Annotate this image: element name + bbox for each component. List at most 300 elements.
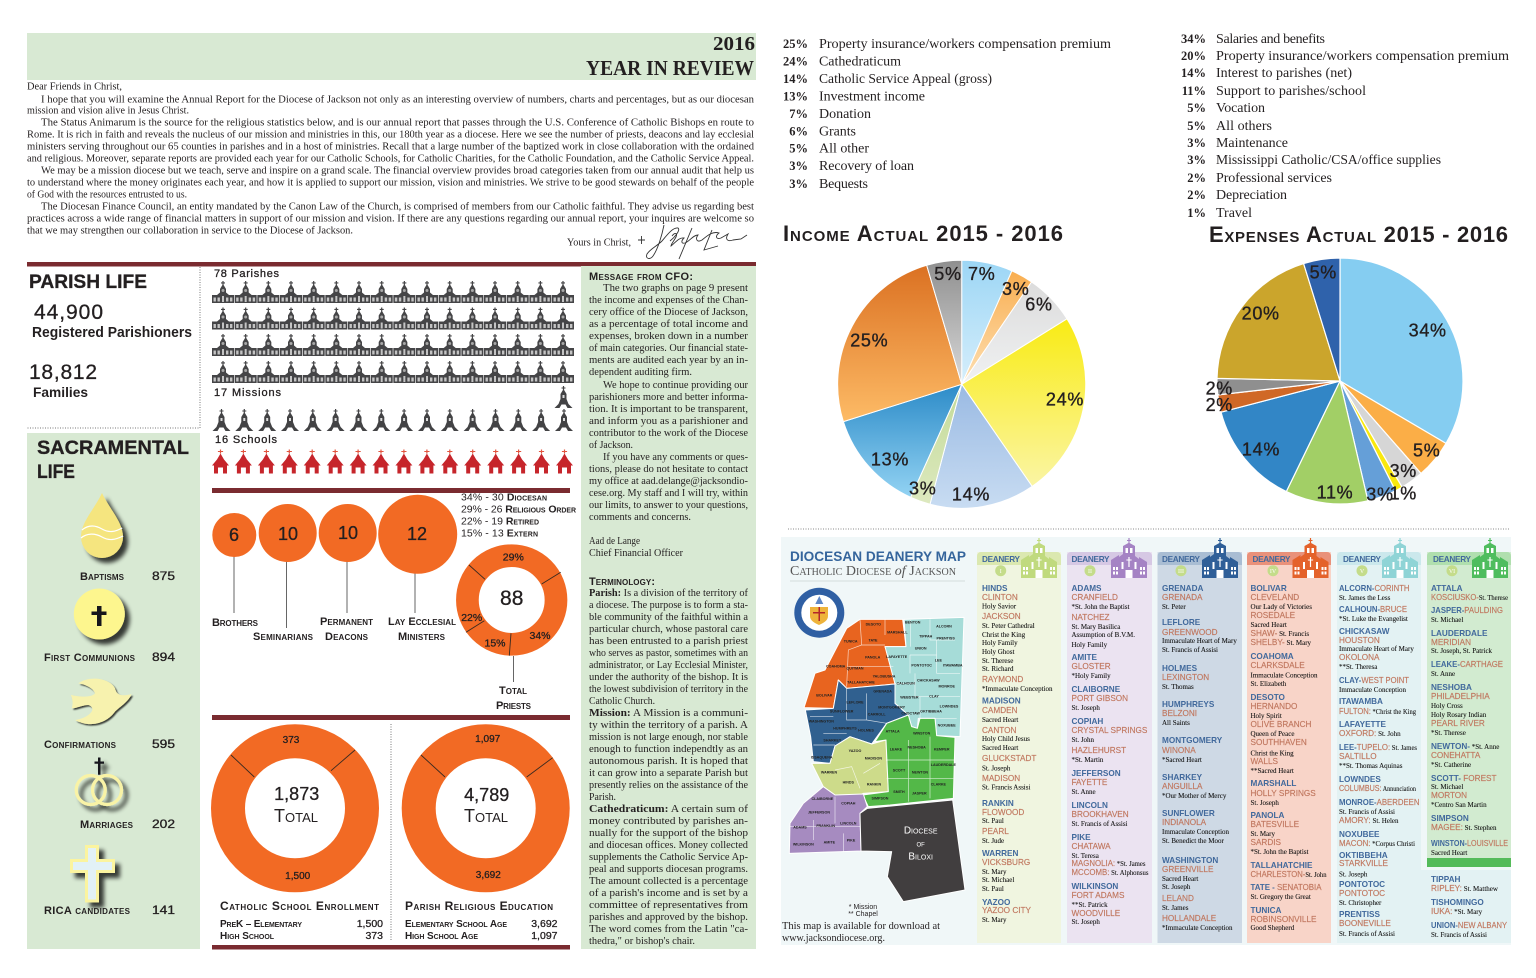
income list: Investment income — [819, 90, 925, 104]
deanery iv: HERNANDO — [1250, 702, 1297, 711]
income list: 6% — [789, 124, 808, 138]
deanery iv: Our Lady of Victories — [1250, 603, 1312, 611]
deanery ii: MAGNOLIA: *St. James — [1072, 859, 1146, 868]
map of mississippi: SUNFLOWER — [830, 709, 854, 713]
deanery iv: SHAW- St. Francis — [1250, 629, 1309, 638]
letter from the bishop: that we may strengthen our collaboration in service to the Diocese of Jackson. — [27, 226, 353, 236]
map of mississippi: ADAMS — [793, 826, 807, 830]
deanery v: LEE-TUPELO: St. James — [1339, 743, 1417, 752]
panel: sacramental life: SACRAMENTAL — [37, 437, 189, 459]
panel: message from cfo and terminology: contributor to the work of the Diocese — [589, 428, 748, 439]
income list: Catholic Service Appeal (gross) — [819, 72, 992, 87]
map of mississippi: HOLMES — [858, 729, 874, 733]
letter from the bishop: mission and vision alive in Jesus Christ. — [27, 106, 189, 116]
panel: message from cfo and terminology: ble community of the faithful within a — [589, 612, 748, 623]
first communions label — [44, 652, 176, 664]
map of mississippi: Diocese — [904, 826, 938, 837]
donut chart: catholic school enrollment: 373 — [365, 930, 383, 942]
deanery ii: II — [1088, 569, 1092, 575]
map of mississippi: MADISON — [865, 757, 882, 761]
letter from the bishop: ministers serving throughout our 65 counties in parishes and in a host of ministries. Recall that a large number of the baptized work in close collaboration with the ordained — [27, 142, 754, 152]
deanery v: St. Francis of Assisi — [1339, 930, 1395, 938]
letter from the bishop: The Diocesan Finance Council, an entity mandated by the Canon Law of the Church, is comprised of members from our Catholic faithful. They advise us regarding best — [41, 202, 754, 212]
map of mississippi: WARREN — [821, 771, 837, 775]
deanery ii: COPIAH — [1072, 717, 1103, 726]
map of mississippi: PANOLA — [865, 656, 881, 660]
deanery iii: GREENWOOD — [1162, 628, 1218, 637]
clergy bubbles — [212, 495, 457, 643]
confirmations label — [44, 739, 175, 751]
panel: message from cfo and terminology: who serves as pastor, sometimes with an — [589, 648, 749, 659]
map of mississippi: SHARKEY — [823, 739, 842, 743]
panel: message from cfo and terminology: The two graphs on page 9 present — [603, 283, 748, 294]
panel: parish life: 44,900 — [34, 301, 103, 324]
deanery vi: CONEHATTA — [1431, 751, 1481, 760]
deanery v: St. Francis of Assisi — [1339, 808, 1395, 816]
deanery iv: CLEVELAND — [1250, 593, 1299, 602]
panel: message from cfo and terminology: We hope to continue providing our — [603, 380, 749, 391]
pie chart: income: 14% — [952, 484, 990, 504]
deanery vi: St. Michael — [1431, 783, 1463, 791]
deanery i: St. Paul — [982, 817, 1004, 825]
deanery v: LOWNDES — [1339, 775, 1381, 784]
divider bar above enrollment — [212, 715, 570, 720]
panel: message from cfo and terminology: committee of representatives from — [589, 900, 748, 911]
clergy bubbles: Ministers — [398, 631, 446, 643]
map key — [848, 904, 878, 918]
pie chart: expenses: 2% — [1206, 378, 1233, 398]
map of mississippi: HINDS — [843, 781, 855, 785]
expenses list: 5% — [1187, 101, 1206, 115]
confirmations label: Confirmations — [44, 739, 117, 751]
deanery ii: FORT ADAMS — [1072, 891, 1125, 900]
expenses list: 2% — [1187, 171, 1206, 185]
expenses list: 5% — [1187, 119, 1206, 133]
donut chart: parish religious education: Total — [464, 806, 508, 826]
letter from the bishop: and religious. Moreover, separate reports are provided each year for our Catholic Schools, for Catholic Charities, for the Catholic Foundation, and the Catholic Service Appeal. — [27, 154, 754, 164]
donut chart: catholic school enrollment: Total — [274, 806, 318, 826]
deanery v: MACON: *Corpus Christi — [1339, 839, 1415, 848]
deanery ii: AMITE — [1072, 653, 1098, 662]
map of mississippi: SMITH — [893, 790, 905, 794]
deanery iii: LEFLORE — [1162, 618, 1201, 627]
heading: income actual: Income Actual 2015 - 2016 — [783, 221, 1063, 246]
income list: 5% — [789, 142, 808, 156]
priests legend: 15% - 13 Extern — [461, 528, 538, 540]
deanery ii: St. Joseph — [1072, 704, 1100, 712]
deanery v: Immaculate Conception — [1339, 686, 1407, 694]
donut chart: total priests: Total — [499, 685, 527, 697]
deanery i: St. Mary — [982, 916, 1007, 924]
pie chart: income: 13% — [871, 450, 909, 470]
deanery iii: GRENADA — [1162, 593, 1203, 602]
deanery i: JACKSON — [982, 612, 1021, 621]
deanery i: Holy Child Jesus — [982, 735, 1030, 743]
expenses list: Professional services — [1216, 171, 1332, 186]
deanery iii: St. Benedict the Moor — [1162, 837, 1224, 845]
map of mississippi: AMITE — [824, 841, 836, 845]
deanery i: VICKSBURG — [982, 858, 1030, 867]
map of mississippi: WINSTON — [913, 732, 931, 736]
expenses list: 1% — [1187, 206, 1206, 220]
first communions label: First Communions — [44, 652, 136, 664]
panel: message from cfo and terminology: Mission: A Mission is a communi- — [589, 708, 749, 719]
panel: message from cfo and terminology: the lowest subdivision of territory in the — [589, 684, 748, 695]
donut chart: catholic school enrollment: 1,500 — [285, 871, 311, 882]
panel: message from cfo and terminology: The amount collected is a percentage — [589, 876, 748, 887]
deanery ii: St. Joseph — [1072, 918, 1100, 926]
deanery iii — [1158, 538, 1242, 943]
panel: message from cfo and terminology: tions, please do not hesitate to contact — [589, 464, 748, 475]
deanery v: DEANERY — [1343, 555, 1382, 564]
deanery v: OKTIBBEHA — [1339, 851, 1388, 860]
map of mississippi: WILKINSON — [793, 843, 814, 847]
deanery vi: St. Francis of Assisi — [1431, 931, 1487, 939]
map of mississippi: PIKE — [847, 838, 856, 842]
panel: message from cfo and terminology: thedra," or bishop's chair. — [589, 936, 695, 947]
pie chart: income: 3% — [909, 478, 936, 498]
deanery ii — [1067, 538, 1152, 943]
icon: wedding rings and cross — [76, 758, 122, 804]
donut chart: total priests: 34% — [529, 630, 551, 642]
deanery i: Holy Savior — [982, 602, 1017, 610]
map title: Catholic Diocese of Jackson — [790, 564, 956, 579]
panel: message from cfo and terminology: our limits, to answer to your questions, — [589, 500, 748, 511]
deanery iii: LELAND — [1162, 894, 1194, 903]
map of mississippi: ITAWAMBA — [943, 664, 963, 668]
panel: message from cfo and terminology: it can grow into a separate Parish but — [589, 768, 748, 779]
map of mississippi: KEMPER — [934, 748, 950, 752]
deanery iv: CLARKSDALE — [1250, 661, 1305, 670]
deanery i: GLUCKSTADT — [982, 754, 1036, 763]
expenses list: Travel — [1216, 206, 1252, 221]
deanery iv: TATE - SENATOBIA — [1250, 883, 1322, 892]
map of mississippi: COPIAH — [841, 802, 856, 806]
map of mississippi: MONROE — [938, 684, 955, 688]
income list: 7% — [789, 107, 808, 121]
icon: communion host — [74, 588, 125, 640]
clergy bubbles: 10 — [278, 524, 298, 544]
deanery ii: St. Mary Basilica — [1072, 623, 1121, 631]
income list: 3% — [789, 177, 808, 191]
donut chart: total priests: 15% — [484, 638, 506, 650]
deanery ii: Assumption of B.V.M. — [1072, 631, 1135, 639]
signature — [638, 225, 747, 259]
deanery vi: PHILADELPHIA — [1431, 692, 1490, 701]
donut chart: total priests: Priests — [496, 700, 532, 712]
deanery i: FLOWOOD — [982, 808, 1024, 817]
priests legend: 29% - 26 Religious Order — [461, 504, 576, 516]
pie chart: income: 24% — [1046, 390, 1084, 410]
deanery iv: Good Shepherd — [1250, 924, 1295, 932]
donut chart: parish religious education: 3,692 — [531, 918, 558, 930]
deanery i: St. Therese — [982, 657, 1013, 665]
marriages label — [80, 819, 175, 831]
deanery i: MADISON — [982, 774, 1020, 783]
donut chart: parish religious education: High School Age — [405, 931, 478, 942]
map of mississippi: TIPPAH — [919, 634, 933, 638]
map of mississippi: CLARKE — [931, 783, 947, 787]
deanery i: I — [1000, 569, 1002, 575]
deanery iv: Immaculate Conception — [1250, 672, 1318, 680]
schools icon row: 16 Schools — [215, 434, 278, 446]
deanery vi: MORTON — [1431, 791, 1467, 800]
deanery i: St. Jude — [982, 837, 1004, 845]
marriages label: Marriages — [80, 819, 134, 831]
deanery vi: RIPLEY: St. Matthew — [1431, 884, 1499, 893]
expenses list: 20% — [1181, 49, 1206, 63]
pie chart: expenses: 1% — [1390, 484, 1417, 504]
deanery vi: *Centro San Martin — [1431, 801, 1487, 809]
deanery i: St. Richard — [982, 665, 1014, 673]
first communions label: 894 — [152, 652, 176, 664]
map of mississippi: CHICKASAW — [917, 678, 940, 682]
expenses list: All others — [1216, 119, 1272, 134]
deanery i: CANTON — [982, 726, 1017, 735]
deanery iv: Holy Spirit — [1250, 712, 1282, 720]
panel: parish life — [27, 267, 200, 428]
deanery iv: BOLIVAR — [1250, 584, 1287, 593]
income list: Recovery of loan — [819, 159, 914, 174]
map of mississippi: TUNICA — [844, 640, 858, 644]
deanery ii: *Holy Family — [1072, 672, 1111, 680]
deanery ii: WILKINSON — [1072, 882, 1118, 891]
deanery v: MONROE-ABERDEEN — [1339, 798, 1420, 807]
income list: Bequests — [819, 177, 868, 192]
letter from the bishop: The Status Animarum is the source for the religious statistics below, and is our annual report that passes through the U.S. Conference of Catholic Bishops en route to — [41, 118, 754, 128]
deanery iii: LEXINGTON — [1162, 673, 1209, 682]
donut chart: catholic school enrollment: High School — [220, 931, 275, 942]
deanery i: Holy Ghost — [982, 648, 1015, 656]
deanery vi: *St. Catherine — [1431, 761, 1471, 769]
letter from the bishop: Rome. It is rich in faith and reveals the nucleus of our mission and ministries in this, our 180th year as a diocese. Here we see the number of priests, deacons and lay ecclesial — [27, 130, 754, 140]
map of mississippi: ATTALA — [886, 729, 900, 733]
map of mississippi: LEFLORE — [846, 701, 864, 705]
deanery iii: HUMPHREYS — [1162, 700, 1215, 709]
map of mississippi: LEE — [935, 658, 942, 662]
deanery v: PONTOTOC — [1339, 889, 1385, 898]
donut chart: parish religious education: 3,692 — [476, 870, 501, 881]
map of mississippi: LAFAYETTE — [886, 655, 908, 659]
pie chart: income — [838, 260, 1086, 508]
map of mississippi: FRANKLIN — [816, 824, 835, 828]
panel: message from cfo and terminology: of main categories. Our financial state- — [589, 343, 749, 354]
income list: Property insurance/workers compensation premium — [819, 37, 1111, 52]
pie chart: expenses: 5% — [1310, 262, 1337, 282]
map of mississippi: MARSHALL — [887, 631, 908, 635]
letter from the bishop — [27, 82, 755, 248]
panel: diocesan deanery map — [781, 537, 1511, 945]
deanery iv: ROBINSONVILLE — [1250, 915, 1317, 924]
donut chart: catholic school enrollment: PreK – Elementary — [220, 919, 302, 930]
panel: message from cfo and terminology: and diocesan offices. Money collected — [589, 840, 749, 851]
map of mississippi: LEAKE — [890, 747, 903, 751]
deanery iv: *St. John the Baptist — [1250, 848, 1309, 856]
panel: message from cfo and terminology: parishioners more and better informa- — [589, 392, 749, 403]
deanery i: Christ the King — [982, 631, 1026, 639]
marriages label: 202 — [152, 819, 175, 831]
divider bar above clergy — [212, 488, 570, 493]
deanery ii: St. John — [1072, 736, 1095, 744]
clergy bubbles: Permanent — [320, 616, 373, 628]
panel: sacramental life: LIFE — [37, 461, 75, 483]
deanery v: Immaculate Heart of Mary — [1339, 645, 1414, 653]
income list: Donation — [819, 107, 871, 122]
clergy bubbles: Deacons — [325, 631, 369, 643]
donut chart: catholic school enrollment — [220, 735, 383, 942]
map of mississippi: PONTOTOC — [911, 664, 932, 668]
donut chart: catholic school enrollment: 1,500 — [357, 918, 383, 930]
pie chart: expenses: 3% — [1390, 461, 1417, 481]
panel: message from cfo and terminology: Cathedraticum: A certain sum of — [589, 804, 749, 815]
deanery v: STARKVILLE — [1339, 859, 1389, 868]
map title: DIOCESAN DEANERY MAP — [790, 549, 966, 564]
expenses list: Property insurance/workers compensation premium — [1216, 49, 1509, 64]
map of mississippi: LAUDERDALE — [931, 763, 956, 767]
deanery vi: St. Michael — [1431, 616, 1463, 624]
deanery iv: OLIVE BRANCH — [1250, 720, 1312, 729]
deanery v: St. Christopher — [1339, 899, 1382, 907]
deanery v: PONTOTOC — [1339, 880, 1385, 889]
panel: message from cfo and terminology: cese.org. My staff and I will try, within — [589, 488, 749, 499]
panel: message from cfo and terminology: supplements the Catholic Service Ap- — [589, 852, 749, 863]
map of mississippi: ALCORN — [936, 625, 952, 629]
income list — [783, 37, 1111, 192]
deanery v: **St. Thomas Aquinas — [1339, 762, 1403, 770]
income list: 13% — [783, 90, 808, 104]
deanery i: RANKIN — [982, 799, 1014, 808]
panel: message from cfo and terminology: of a parish's income and is set by a — [589, 888, 748, 899]
deanery vi: *St. Therese — [1431, 729, 1466, 737]
deanery vi: ATTALA — [1431, 584, 1463, 593]
panel: message from cfo and terminology: ments are audited each year by an in- — [589, 355, 749, 366]
panel: message from cfo and terminology: Aad de Lange — [589, 536, 640, 547]
map of mississippi: MONTGOMERY — [878, 706, 906, 710]
panel: message from cfo and terminology: particular church, whose pastoral care — [589, 624, 748, 635]
panel: message from cfo and terminology: Parish: Is a division of the territory of — [589, 588, 749, 599]
deanery ii: GLOSTER — [1072, 662, 1111, 671]
rica label: RICA candidates — [44, 905, 131, 917]
map of mississippi: CARROLL — [868, 712, 886, 716]
expenses list: 34% — [1181, 32, 1206, 46]
deanery i: Sacred Heart — [982, 744, 1018, 752]
panel: message from cfo and terminology — [581, 266, 756, 949]
deanery vi: KOSCIUSKO-St. Therese — [1431, 593, 1508, 602]
header band: 2016 year in review: YEAR IN REVIEW — [586, 56, 754, 80]
map of mississippi: ISSAQUENA — [811, 756, 833, 760]
icon: water drop — [81, 493, 123, 558]
deanery vi: IUKA: *St. Mary — [1431, 907, 1483, 916]
header band: 2016 year in review: 2016 — [713, 33, 755, 55]
pie chart: expenses — [1206, 258, 1463, 504]
panel: parish life: 18,812 — [29, 361, 97, 384]
deanery i: St. Michael — [982, 876, 1014, 884]
deanery i: St. Joseph — [982, 764, 1011, 772]
deanery v: COLUMBUS: Annunciation — [1339, 784, 1416, 793]
deanery v: AMORY: St. Helen — [1339, 816, 1399, 825]
pie chart: income: 25% — [850, 330, 888, 350]
deanery i: WARREN — [982, 849, 1018, 858]
deanery iii: SHARKEY — [1162, 773, 1203, 782]
map of mississippi: WEBSTER — [900, 695, 919, 699]
panel: message from cfo and terminology: Parish. — [589, 792, 616, 803]
clergy bubbles: 10 — [338, 523, 358, 543]
panel: message from cfo and terminology: The word comes from the Latin "ca- — [589, 924, 749, 935]
deanery vi: JASPER-PAULDING — [1431, 606, 1503, 615]
expenses list: 11% — [1182, 84, 1206, 98]
panel: message from cfo and terminology: parishes and approved by the bishop. — [589, 912, 748, 923]
letter from the bishop: I hope that you will examine the Annual Report for the Diocese of Jackson not only as an interesting overview of numbers, charts and percentages, but as our diocesan — [41, 94, 754, 106]
panel: sacramental life — [27, 433, 200, 949]
baptisms label: Baptisms — [80, 571, 125, 583]
deanery ii: CRANFIELD — [1072, 593, 1118, 602]
deanery v: CALHOUN-BRUCE — [1339, 605, 1407, 614]
deanery iv: MARSHALL — [1250, 779, 1296, 788]
deanery v: ITAWAMBA — [1339, 697, 1383, 706]
pie chart: expenses: 3% — [1366, 484, 1394, 504]
deanery iv: WALLS — [1250, 757, 1278, 766]
deanery i: St. Mary — [982, 868, 1007, 876]
panel: message from cfo and terminology: of Jackson. — [589, 440, 633, 451]
deanery iii: INDIANOLA — [1162, 818, 1207, 827]
map of mississippi: OKTIBBEHA — [920, 710, 942, 714]
panel: message from cfo and terminology: money contributed by parishes an- — [589, 816, 749, 827]
deanery iv: SHELBY- St. Mary — [1250, 638, 1312, 647]
deanery iii: St. James — [1162, 904, 1189, 912]
deanery ii: *St. Martin — [1072, 756, 1104, 764]
icon: dove — [71, 679, 132, 724]
deanery i: CAMDEN — [982, 706, 1018, 715]
baptisms label — [80, 571, 175, 583]
letter from the bishop: practices across a wide range of financial matters in support of our mission and vision. If there are any questions regarding our annual report, your inquires are welcome so — [27, 214, 754, 224]
deanery iii: WASHINGTON — [1162, 856, 1218, 865]
deanery iii: *Immaculate Conception — [1162, 924, 1233, 932]
donut chart: parish religious education: 1,097 — [475, 734, 501, 745]
parishes icon grid: 78 Parishes — [214, 268, 280, 280]
map of mississippi: CHOCTAW — [901, 712, 921, 716]
donut chart: parish religious education: 4,789 — [464, 785, 509, 805]
pie chart: expenses: 5% — [1413, 440, 1440, 460]
panel: message from cfo and terminology: Terminology: — [589, 576, 655, 588]
deanery iv: **Sacred Heart — [1250, 767, 1294, 775]
map of mississippi: COAHOMA — [826, 665, 846, 669]
donut chart: catholic school enrollment: Catholic School Enrollment — [220, 899, 379, 913]
pie chart: expenses: 2% — [1206, 395, 1233, 415]
deanery v: SALTILLO — [1339, 752, 1377, 761]
expenses list: Vocation — [1216, 101, 1265, 116]
deanery i: PEARL — [982, 827, 1009, 836]
deanery iv: COAHOMA — [1250, 652, 1294, 661]
deanery ii: St. Anne — [1072, 788, 1096, 796]
deanery vi: WINSTON-LOUISVILLE — [1431, 839, 1508, 848]
income list: 25% — [783, 37, 808, 51]
map of mississippi: RANKIN — [867, 783, 881, 787]
map of mississippi: CALHOUN — [897, 682, 915, 686]
deanery iii: Sacred Heart — [1162, 875, 1198, 883]
map of mississippi: QUITMAN — [846, 667, 864, 671]
deanery i: HINDS — [982, 584, 1008, 593]
pie chart: income: 3% — [1002, 279, 1029, 299]
panel: parish life: Registered Parishioners — [32, 325, 192, 341]
deanery vi: St. Joseph, St. Patrick — [1431, 647, 1493, 655]
panel: message from cfo and terminology: tion. It is important to be transparent, — [589, 404, 748, 415]
letter from the bishop: of God with the resources entrusted to us. — [27, 190, 187, 200]
deanery iv: DESOTO — [1250, 693, 1286, 702]
deanery ii: **St. Patrick — [1072, 901, 1108, 909]
deanery vi: MAGEE: St. Stephen — [1431, 823, 1497, 832]
deanery ii: FAYETTE — [1072, 778, 1108, 787]
income list: Grants — [819, 124, 856, 140]
